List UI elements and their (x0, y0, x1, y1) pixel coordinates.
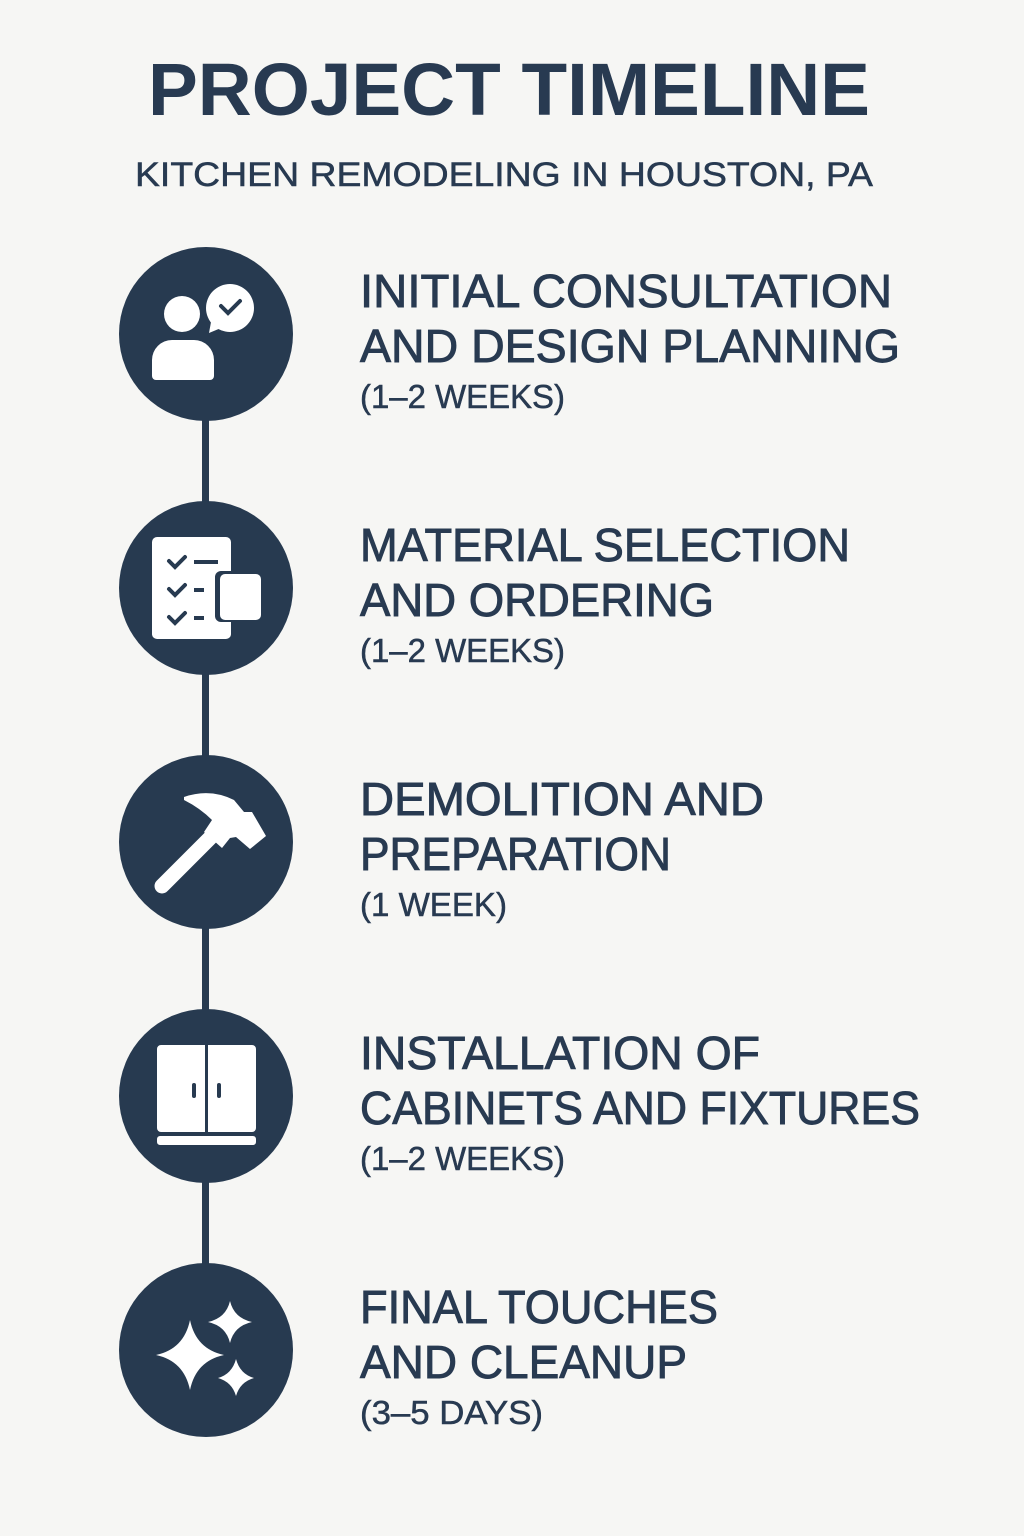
text: step 3: PREPARATION (360, 828, 671, 880)
text: step 1: AND DESIGN PLANNING (360, 320, 900, 372)
text: step 5 (360, 1281, 718, 1431)
text: step 2 (360, 519, 850, 669)
text: step 5: (3–5 DAYS) (360, 1394, 543, 1431)
text: step 1: (1–2 WEEKS) (360, 378, 565, 415)
step 3: demolition (119, 755, 764, 929)
subtitle: KITCHEN REMODELING IN HOUSTON, PA (135, 156, 873, 194)
text: step 1: INITIAL CONSULTATION (360, 265, 892, 317)
text: step 4 (360, 1027, 920, 1177)
icon: consultation circle (119, 247, 293, 421)
text: step 5: FINAL TOUCHES (360, 1281, 718, 1333)
text: step 3: DEMOLITION AND (360, 773, 764, 825)
step 4: installation (119, 1009, 920, 1183)
text: step 5: AND CLEANUP (360, 1336, 687, 1388)
text: step 3: (1 WEEK) (360, 886, 507, 923)
icon: cabinet circle (119, 1009, 293, 1183)
text: step 4: CABINETS AND FIXTURES (360, 1082, 920, 1134)
icon: checklist circle (119, 501, 293, 675)
text: step 2: MATERIAL SELECTION (360, 519, 850, 571)
icon: sparkles circle (119, 1263, 293, 1437)
step 2: materials (119, 501, 850, 675)
text: step 2: AND ORDERING (360, 574, 714, 626)
timeline connector line (202, 334, 209, 1350)
step 1: consultation (119, 247, 900, 421)
text: step 1 (360, 265, 900, 415)
text: step 2: (1–2 WEEKS) (360, 632, 565, 669)
text: step 4: INSTALLATION OF (360, 1027, 760, 1079)
title: PROJECT TIMELINE (148, 48, 870, 131)
text: step 3 (360, 773, 764, 923)
step 5: final touches (119, 1263, 718, 1437)
text: step 4: (1–2 WEEKS) (360, 1140, 565, 1177)
icon: hammer circle (119, 755, 293, 929)
